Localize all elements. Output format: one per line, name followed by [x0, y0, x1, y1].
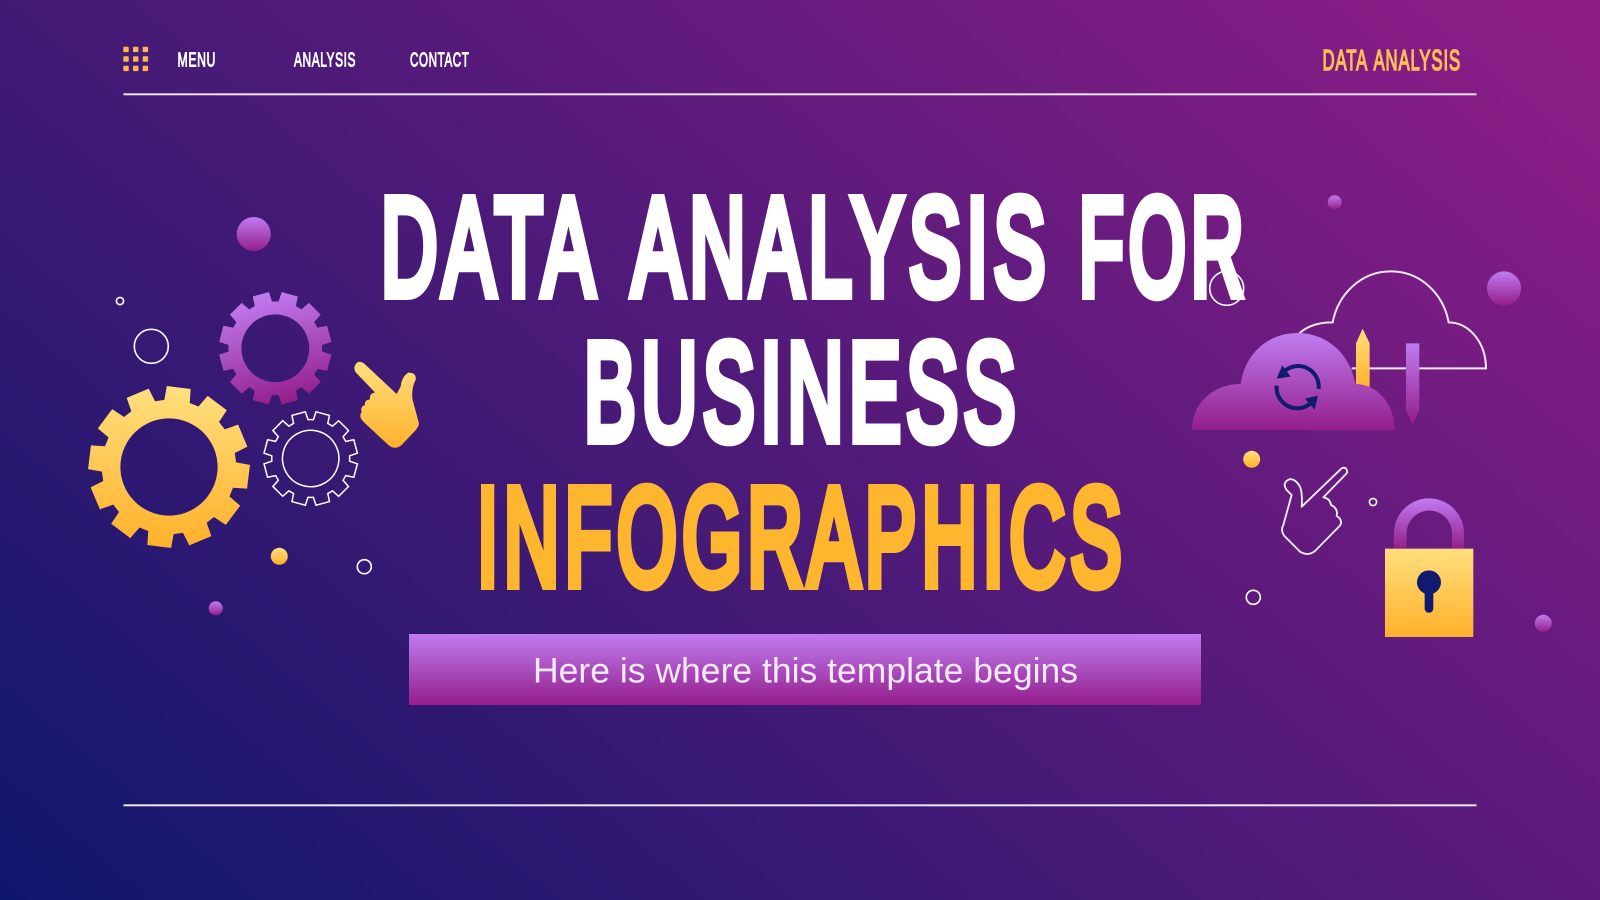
title: [381, 170, 1249, 614]
header label: data analysis: DATA ANALYSIS: [1322, 45, 1461, 77]
title line 1: ANALYSIS: [632, 170, 1051, 324]
icon: menu grid: [123, 47, 148, 71]
icon: padlock: [1385, 498, 1473, 637]
nav item: menu: MENU: [178, 48, 216, 71]
icon: purple pencil: [1406, 343, 1419, 424]
icon: sync arrows: [1277, 365, 1319, 410]
title line 1: DATA: [381, 170, 600, 324]
decorative dots right: [1210, 195, 1552, 632]
subtitle text: Here is where this template begins: [533, 650, 1078, 690]
nav item: analysis: ANALYSIS: [294, 48, 356, 71]
navigation header: [123, 45, 1461, 77]
subtitle banner: [409, 634, 1201, 705]
right illustration: cloud: [1192, 271, 1486, 430]
icon: filled cloud: [1192, 333, 1395, 430]
title line 1: FOR: [1079, 170, 1249, 324]
icon: yellow pencil: [1356, 329, 1370, 388]
decorative dots left: [116, 217, 371, 615]
title line 1: [381, 170, 1249, 324]
icon: yellow pointing hand: [354, 362, 419, 448]
icon: outline pointing hand: [1282, 468, 1347, 554]
title line 2: BUSINESS: [584, 316, 1021, 470]
icon: outline gear: [254, 402, 368, 515]
left illustration: gears: [80, 217, 419, 615]
right illustration: hand and lock: [1282, 468, 1473, 637]
icon: outline cloud: [1299, 271, 1486, 368]
nav item: contact: CONTACT: [410, 48, 470, 71]
icon: purple gear: [207, 280, 344, 417]
icon: large yellow gear: [80, 378, 258, 556]
